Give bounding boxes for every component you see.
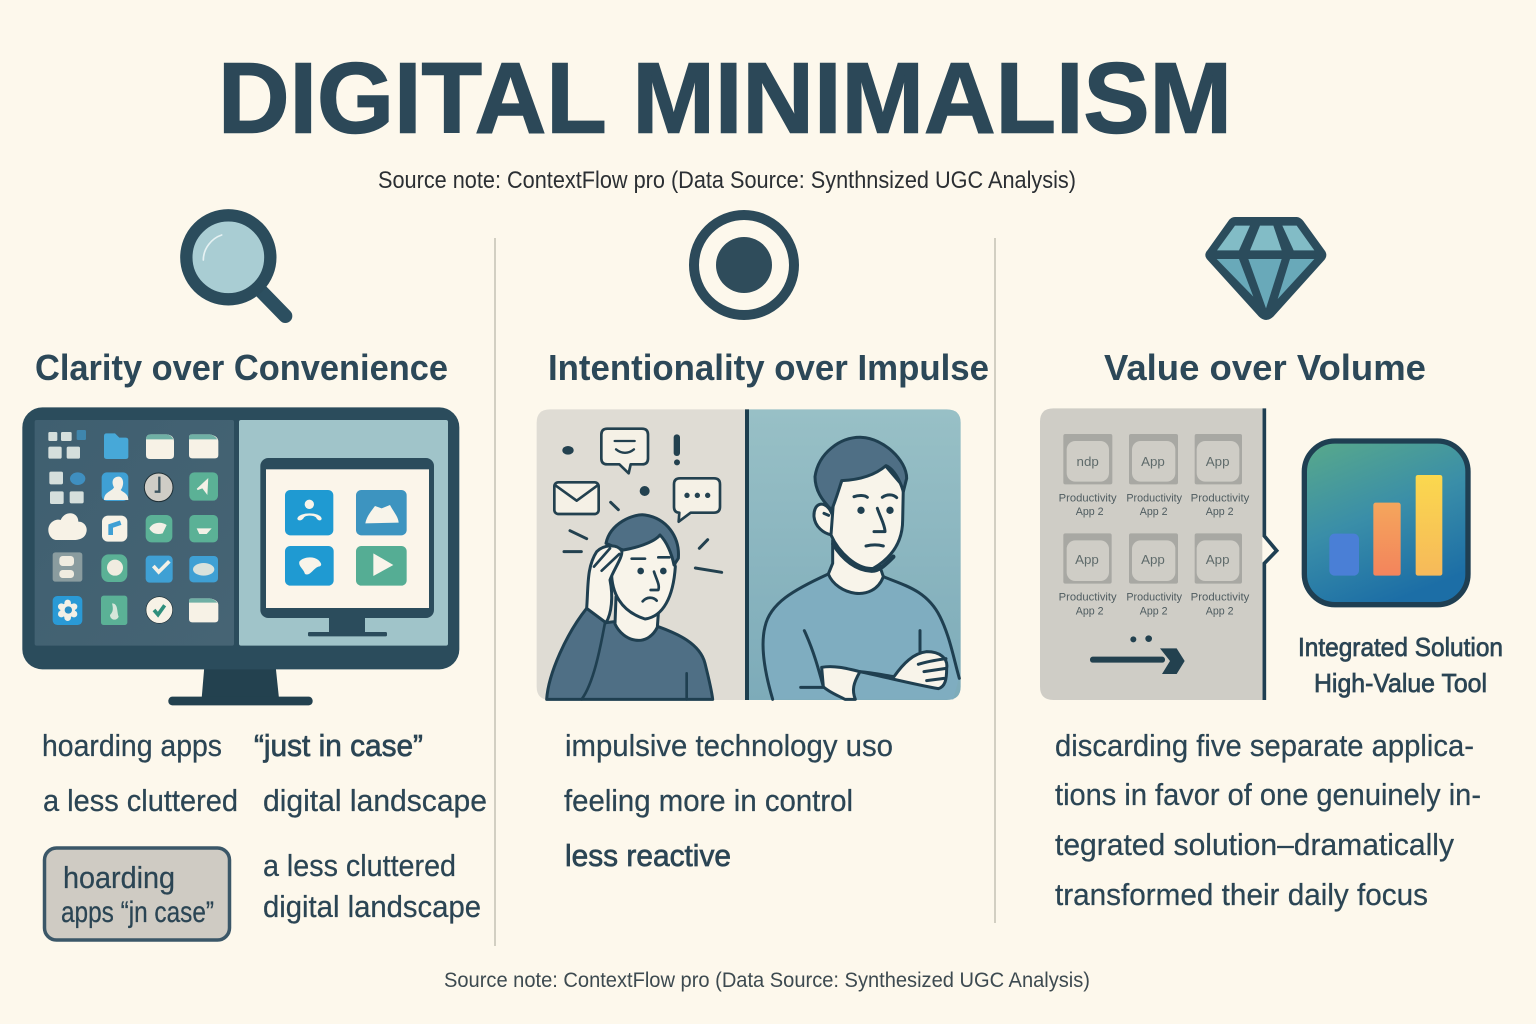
panel: separate apps: App 2 bbox=[1206, 506, 1234, 518]
icon: target bbox=[694, 215, 794, 315]
panel: separate apps: App bbox=[1206, 454, 1230, 469]
icon: magnifying glass bbox=[186, 215, 285, 316]
text: clarity column: digital landscape bbox=[263, 783, 487, 818]
panel divider with chevron bbox=[1264, 408, 1277, 700]
panel: separate apps: App bbox=[1075, 552, 1099, 567]
bottom source note: Source note: ContextFlow pro (Data Source: Synthesized UGC Analysis) bbox=[444, 969, 1090, 992]
monitor stand bbox=[168, 667, 313, 705]
callout: hoarding apps: hoarding bbox=[63, 860, 175, 895]
panel: distracted bbox=[537, 409, 745, 700]
panel: separate apps bbox=[1040, 408, 1262, 700]
panel: separate apps: App 2 bbox=[1140, 606, 1168, 618]
icon: diamond bbox=[1205, 217, 1326, 320]
callout: hoarding apps bbox=[44, 848, 230, 940]
text: intentionality column bbox=[564, 728, 893, 873]
text: clarity column: a less cluttered bbox=[43, 783, 238, 818]
panel: separate apps: Productivity bbox=[1126, 493, 1183, 505]
heading: intentionality: Intentionality over Impulse bbox=[548, 347, 989, 388]
heading: clarity: Clarity over Convenience bbox=[35, 347, 448, 388]
text: clarity column bbox=[42, 728, 487, 924]
panel: separate apps: App 2 bbox=[1076, 606, 1104, 618]
illustration: many apps versus one tool bbox=[1040, 408, 1468, 700]
distracted person bbox=[547, 515, 713, 699]
icon: integrated tool bbox=[1304, 441, 1468, 605]
panel: separate apps: Productivity bbox=[1059, 592, 1117, 604]
text: value column bbox=[1055, 728, 1481, 912]
callout: hoarding apps: apps “jn case” bbox=[61, 896, 214, 929]
label: integrated solution: High-Value Tool bbox=[1314, 668, 1487, 698]
text: clarity column: “just in case” bbox=[254, 728, 423, 763]
panel: separate apps: App 2 bbox=[1076, 506, 1104, 518]
text: value column: tions in favor of one genuinely in- bbox=[1055, 777, 1481, 812]
panel: separate apps: App 2 bbox=[1140, 506, 1168, 518]
label: integrated solution: Integrated Solution bbox=[1298, 632, 1503, 662]
cluttered desktop bbox=[35, 420, 234, 646]
panel: separate apps: Productivity bbox=[1126, 592, 1183, 604]
text: clarity column: hoarding apps bbox=[42, 728, 222, 763]
panel: separate apps: App 2 bbox=[1206, 606, 1234, 618]
text: value column: discarding five separate applica- bbox=[1055, 728, 1474, 763]
illustration: distracted versus focused panels bbox=[537, 409, 961, 700]
panel: separate apps: Productivity bbox=[1059, 493, 1117, 505]
panel: focused bbox=[749, 409, 961, 700]
panel: separate apps: App bbox=[1141, 552, 1165, 567]
panel: separate apps: Productivity bbox=[1191, 493, 1250, 505]
panel: separate apps: Productivity bbox=[1191, 592, 1250, 604]
text: value column: tegrated solution–dramatically bbox=[1055, 827, 1454, 862]
text: value column: transformed their daily focus bbox=[1055, 877, 1428, 912]
focused person bbox=[763, 437, 959, 699]
panel: separate apps: App bbox=[1206, 552, 1230, 567]
title: DIGITAL MINIMALISM bbox=[218, 42, 1232, 154]
text: intentionality column: impulsive technology uso bbox=[565, 728, 893, 763]
panel: separate apps: ndp bbox=[1077, 454, 1099, 469]
text: clarity column: digital landscape bbox=[263, 889, 481, 924]
top source note: Source note: ContextFlow pro (Data Source: Synthnsized UGC Analysis) bbox=[378, 167, 1076, 194]
clean desktop bbox=[239, 420, 448, 646]
text: intentionality column: less reactive bbox=[565, 838, 731, 873]
heading: value: Value over Volume bbox=[1104, 347, 1426, 388]
arrow bbox=[1090, 648, 1185, 674]
illustration: monitor with cluttered and clean desktop bbox=[22, 407, 459, 705]
text: intentionality column: feeling more in control bbox=[564, 783, 853, 818]
panel divider bbox=[745, 409, 749, 700]
text: clarity column: a less cluttered bbox=[263, 848, 456, 883]
monitor body bbox=[22, 407, 459, 669]
panel: separate apps: App bbox=[1141, 454, 1165, 469]
label: integrated solution bbox=[1298, 632, 1503, 698]
